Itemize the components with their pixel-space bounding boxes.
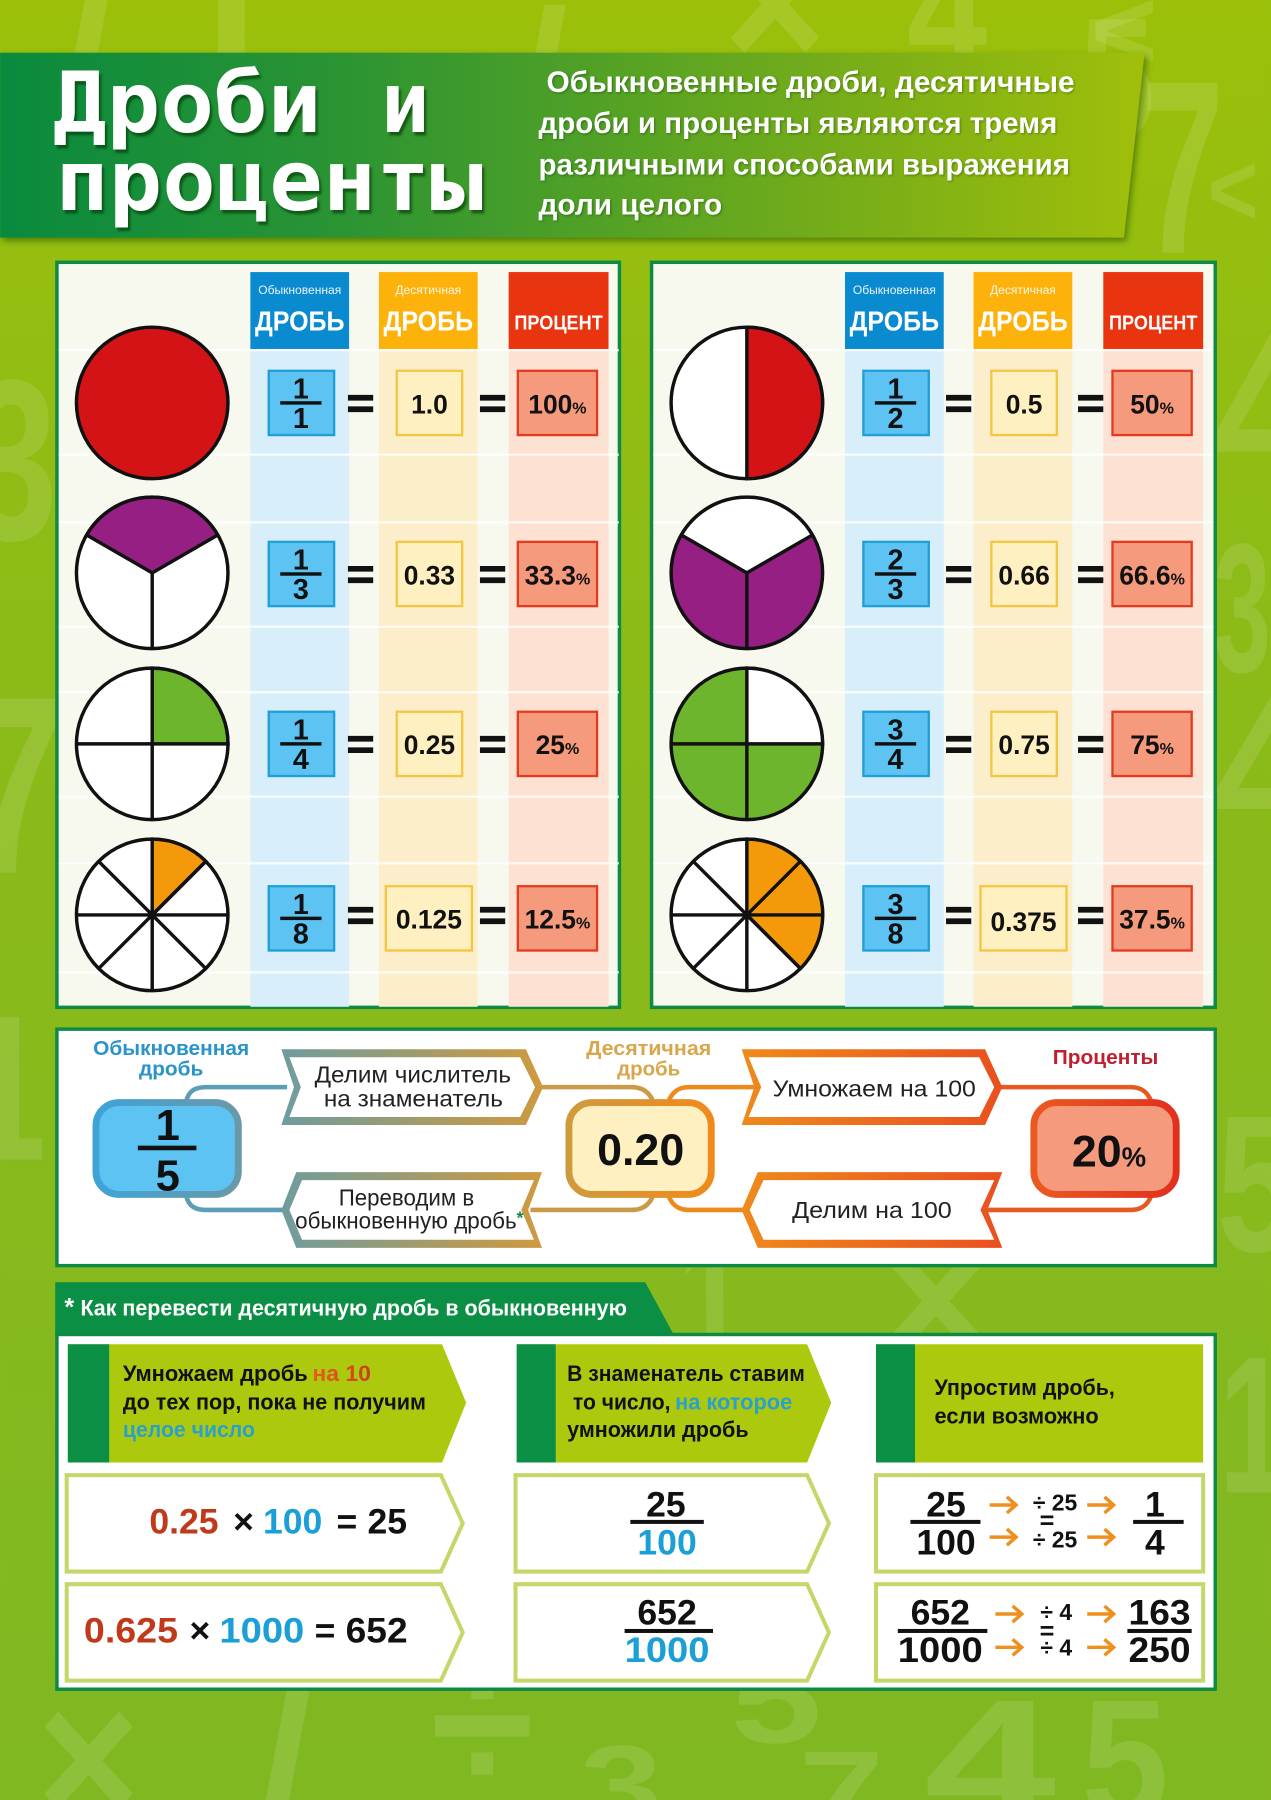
row 1/4: 0.25 bbox=[404, 730, 455, 760]
row 1/2: 2 bbox=[888, 403, 903, 435]
row 3/4: 0.75 bbox=[998, 730, 1050, 760]
row 3/8: 8 bbox=[888, 919, 904, 951]
row 1/8: 8 bbox=[293, 919, 309, 951]
intro text: различными способами выражения bbox=[538, 148, 1070, 181]
example: 0.25 x 100: 25 bbox=[367, 1502, 407, 1542]
label: common fraction: Обыкновенная bbox=[93, 1037, 249, 1060]
example: 0.25 x 100: × bbox=[233, 1502, 254, 1542]
step 2 header: умножили дробь bbox=[567, 1417, 749, 1442]
step 1 header: Умножаем дробь bbox=[123, 1361, 308, 1386]
arrows bbox=[990, 1497, 1114, 1545]
example: 0.25 x 100: = bbox=[336, 1502, 357, 1542]
arrow: divide by 100 bbox=[742, 1172, 1002, 1248]
column headers: ДРОБЬ bbox=[978, 306, 1068, 337]
arrow: divide numerator: на знаменатель bbox=[324, 1086, 503, 1112]
row 3/4 bbox=[863, 712, 1192, 776]
row 1/3: 3 bbox=[293, 574, 309, 606]
example: simplify 25/100: ÷ 25 bbox=[1033, 1490, 1078, 1516]
row 3/8: 3 bbox=[888, 889, 903, 921]
box: 1/5: 1 bbox=[156, 1102, 180, 1150]
row 3/4: 4 bbox=[888, 744, 904, 776]
arrow: multiply by 100: Умножаем на 100 bbox=[773, 1075, 976, 1101]
row 1/4: 1 bbox=[293, 714, 309, 746]
column tints bbox=[653, 349, 1213, 1007]
label: percent: Проценты bbox=[1053, 1046, 1158, 1069]
example: simplify 652/1000 bbox=[876, 1584, 1203, 1681]
row 1/2 bbox=[863, 371, 1192, 435]
box: 0.20: 0.20 bbox=[597, 1125, 684, 1175]
row 3/4: 75% bbox=[1130, 730, 1174, 760]
connectors bbox=[186, 1087, 1152, 1210]
row 2/3: 2 bbox=[888, 544, 903, 576]
background digits pattern: × bbox=[884, 1190, 987, 1408]
column headers: Десятичная bbox=[395, 283, 461, 297]
step 1 header: до тех пор, пока не получим bbox=[123, 1390, 426, 1415]
example: simplify 25/100: ÷ 25 bbox=[1033, 1526, 1078, 1552]
row 1/1: 100% bbox=[528, 389, 587, 419]
arrow: multiply by 100 bbox=[742, 1049, 1002, 1125]
intro text: доли целого bbox=[538, 189, 722, 222]
row 1/1: 1.0 bbox=[411, 389, 448, 419]
box: 20%: 20% bbox=[1072, 1126, 1146, 1176]
pie: 3/8 bbox=[671, 839, 823, 991]
step 3 header: если возможно bbox=[935, 1403, 1099, 1428]
row 1/4: 4 bbox=[293, 744, 309, 776]
tab: how to convert heading: * bbox=[64, 1294, 74, 1322]
example: simplify 25/100: 4 bbox=[1145, 1522, 1165, 1562]
example: 0.625 x 1000: = bbox=[315, 1611, 335, 1651]
row 1/3: 0.33 bbox=[404, 560, 455, 590]
row 1/1: 1 bbox=[293, 403, 309, 435]
row 3/8: 0.375 bbox=[990, 907, 1057, 937]
example: simplify 25/100: 100 bbox=[916, 1522, 976, 1562]
box: 0.20 bbox=[569, 1103, 711, 1194]
tab: how to convert heading: Как перевести десятичную дробь в обыкновенную bbox=[80, 1296, 627, 1321]
arrow: convert to fraction bbox=[281, 1172, 542, 1248]
panel: left fractions table bbox=[57, 262, 619, 1007]
row 3/8: 37.5% bbox=[1119, 905, 1185, 935]
example: 652/1000: 652 bbox=[637, 1592, 697, 1632]
title: и bbox=[381, 54, 429, 152]
pie: 1/4 bbox=[76, 668, 228, 820]
column headers: ДРОБЬ bbox=[384, 306, 473, 337]
column headers: Десятичная bbox=[990, 283, 1056, 297]
column headers: ДРОБЬ bbox=[255, 306, 344, 337]
step 2 header: то число, bbox=[573, 1390, 671, 1415]
example: 25/100: 25 bbox=[646, 1484, 686, 1524]
example: simplify 652/1000: 652 bbox=[911, 1592, 970, 1632]
step 2 header: В знаменатель ставим bbox=[567, 1361, 805, 1386]
tab: how to convert heading bbox=[55, 1282, 674, 1335]
background digits pattern: < bbox=[1208, 131, 1258, 247]
arrow: divide numerator bbox=[281, 1049, 543, 1125]
box: 1/5 bbox=[96, 1102, 238, 1200]
example: 25/100: 100 bbox=[637, 1522, 697, 1562]
box: 1/5: 5 bbox=[156, 1152, 180, 1200]
row 1/4 bbox=[269, 712, 597, 776]
label: decimal: Десятичная bbox=[586, 1037, 711, 1060]
column headers: ДРОБЬ bbox=[850, 306, 939, 337]
row 1/8: 0.125 bbox=[396, 905, 462, 935]
pie: 3/4 bbox=[671, 668, 823, 820]
row 1/8: 12.5% bbox=[525, 905, 590, 935]
row 2/3: 0.66 bbox=[998, 560, 1050, 590]
pie: 2/3 bbox=[671, 497, 823, 649]
step 2 header: на которое bbox=[675, 1390, 792, 1415]
row 1/3: 33.3% bbox=[525, 560, 590, 590]
example: 0.625 x 1000: × bbox=[190, 1611, 210, 1651]
row 1/3 bbox=[269, 542, 597, 606]
example: 0.25 x 100 bbox=[67, 1475, 463, 1572]
arrow: divide by 100: Делим на 100 bbox=[792, 1197, 952, 1223]
example: 0.625 x 1000: 0.625 bbox=[84, 1611, 178, 1651]
row 1/2: 50% bbox=[1130, 389, 1174, 419]
example: simplify 25/100 bbox=[876, 1475, 1203, 1572]
pie: 1/8 bbox=[76, 839, 228, 991]
column headers: ПРОЦЕНТ bbox=[1109, 311, 1198, 334]
panel: right fractions table bbox=[652, 262, 1215, 1007]
example: simplify 25/100: = bbox=[1040, 1507, 1054, 1535]
pie: 1/1 bbox=[76, 327, 228, 479]
label: decimal: дробь bbox=[617, 1058, 680, 1081]
title bbox=[53, 54, 483, 230]
pie: 1/3 bbox=[76, 497, 228, 649]
panel: conversion flow bbox=[57, 1029, 1215, 1266]
row 3/8 bbox=[863, 886, 1192, 951]
example: simplify 652/1000: 250 bbox=[1129, 1630, 1191, 1670]
arrows bbox=[995, 1606, 1114, 1655]
example: 25/100 bbox=[516, 1475, 829, 1572]
row 1/8 bbox=[269, 886, 597, 951]
arrow: convert to fraction: обыкновенную дробь bbox=[295, 1207, 517, 1233]
background digits pattern: 5 bbox=[730, 1629, 822, 1770]
example: 652/1000: 1000 bbox=[625, 1630, 710, 1670]
arrow: divide numerator: Делим числитель bbox=[315, 1062, 511, 1088]
row 2/3 bbox=[863, 542, 1192, 606]
intro text: дроби и проценты являются тремя bbox=[538, 107, 1057, 140]
pie: 1/2 bbox=[671, 327, 823, 479]
row 2/3: 66.6% bbox=[1119, 560, 1185, 590]
step 2 header bbox=[517, 1344, 831, 1462]
example: 0.625 x 1000: 1000 bbox=[219, 1611, 304, 1651]
example: simplify 652/1000: 163 bbox=[1129, 1592, 1191, 1632]
intro text bbox=[538, 66, 1075, 222]
example: 0.25 x 100: 0.25 bbox=[149, 1502, 219, 1542]
box: 20% bbox=[1034, 1103, 1176, 1194]
row 1/2: 1 bbox=[888, 373, 904, 405]
column headers: Обыкновенная bbox=[258, 283, 341, 297]
title: проценты bbox=[55, 132, 483, 230]
row 2/3: 3 bbox=[888, 574, 903, 606]
column tints bbox=[59, 349, 619, 1007]
step 3 header: Упростим дробь, bbox=[935, 1375, 1115, 1400]
arrow: convert to fraction: * bbox=[517, 1208, 524, 1228]
row 1/8: 1 bbox=[293, 889, 309, 921]
example: 652/1000 bbox=[516, 1584, 829, 1681]
example: simplify 652/1000: ÷ 4 bbox=[1040, 1599, 1072, 1625]
step 1 header bbox=[68, 1344, 466, 1462]
step 1 header: на 10 bbox=[312, 1361, 371, 1386]
column headers bbox=[845, 272, 1203, 349]
example: 0.625 x 1000: 652 bbox=[346, 1611, 408, 1651]
step 3 header bbox=[876, 1344, 1203, 1462]
row 1/4: 25% bbox=[536, 730, 579, 760]
row 1/3: 1 bbox=[293, 544, 309, 576]
example: simplify 652/1000: = bbox=[1040, 1617, 1054, 1645]
arrow: convert to fraction: Переводим в bbox=[339, 1184, 474, 1210]
panel: conversion steps bbox=[57, 1335, 1215, 1689]
header banner bbox=[0, 53, 1145, 238]
example: 0.625 x 1000 bbox=[67, 1584, 463, 1681]
intro text: Обыкновенные дроби, десятичные bbox=[547, 66, 1075, 99]
example: simplify 25/100: 1 bbox=[1145, 1484, 1165, 1524]
row 1/1: 1 bbox=[293, 373, 309, 405]
label: common fraction: дробь bbox=[139, 1058, 203, 1081]
example: 0.25 x 100: 100 bbox=[263, 1502, 322, 1542]
step 1 header: целое число bbox=[123, 1417, 255, 1442]
row 1/2: 0.5 bbox=[1006, 389, 1042, 419]
example: simplify 652/1000: 1000 bbox=[898, 1630, 983, 1670]
column headers bbox=[250, 272, 609, 349]
title: Дроби bbox=[53, 54, 322, 152]
column headers: ПРОЦЕНТ bbox=[514, 311, 603, 334]
example: simplify 652/1000: ÷ 4 bbox=[1040, 1634, 1072, 1660]
row 1/1 bbox=[269, 371, 597, 435]
column headers: Обыкновенная bbox=[853, 283, 936, 297]
example: simplify 25/100: 25 bbox=[926, 1484, 966, 1524]
label: decimal bbox=[586, 1037, 711, 1081]
label: common fraction bbox=[93, 1037, 249, 1081]
background digits pattern: 1 bbox=[677, 1190, 746, 1408]
row 3/4: 3 bbox=[888, 714, 903, 746]
